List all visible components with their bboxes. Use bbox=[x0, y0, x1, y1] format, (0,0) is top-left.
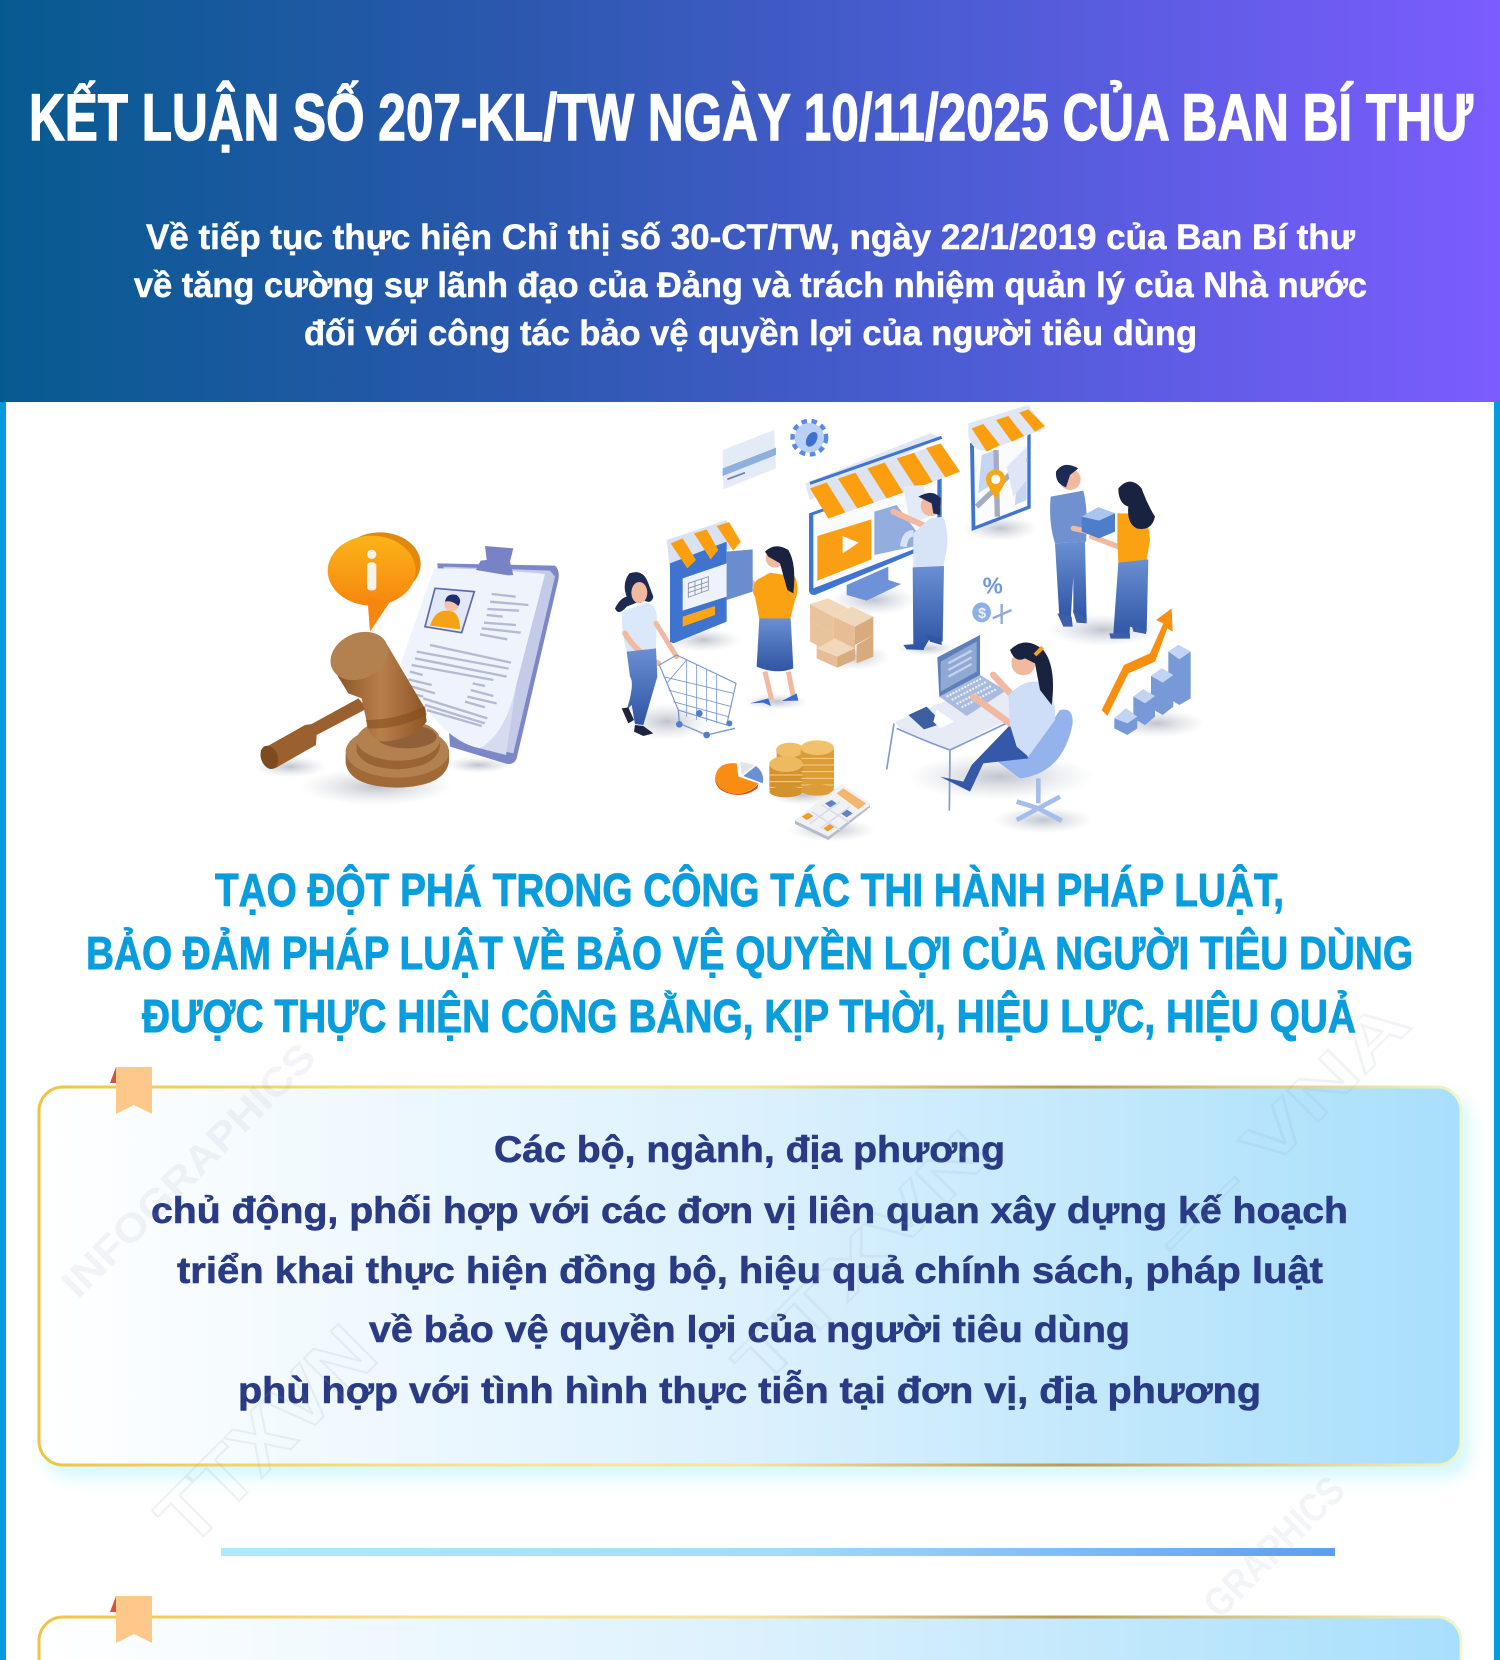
document lines bbox=[405, 594, 528, 726]
watermark: TTXVN bbox=[719, 1116, 1003, 1400]
icon: bookmark ribbon bbox=[110, 1596, 152, 1643]
icon: woman pushing a cart bbox=[615, 572, 736, 740]
main heading: TẠO ĐỘT PHÁ TRONG CÔNG TÁC THI HÀNH PHÁP LUẬT, bbox=[215, 864, 1284, 916]
panel text: về bảo vệ quyền lợi của người tiêu dùng bbox=[369, 1309, 1130, 1350]
watermark: GRAPHICS bbox=[1195, 1468, 1354, 1626]
icon: percent, dollar and plus symbols: % bbox=[983, 572, 1003, 598]
main heading bbox=[86, 864, 1413, 1042]
icon: cardboard boxes bbox=[810, 598, 890, 670]
icon: coin stacks bbox=[767, 740, 840, 805]
panel: second card (cropped) bbox=[39, 1596, 1461, 1660]
icon: pie chart bbox=[715, 762, 763, 795]
panel text: chủ động, phối hợp với các đơn vị liên quan xây dựng kế hoạch bbox=[151, 1190, 1348, 1231]
panel text: Các bộ, ngành, địa phương bbox=[494, 1129, 1005, 1170]
icon: gear bbox=[793, 422, 825, 454]
watermark: — VNA bbox=[1139, 986, 1423, 1270]
panel text: triển khai thực hiện đồng bộ, hiệu quả chính sách, pháp luật bbox=[177, 1250, 1323, 1291]
divider bar bbox=[221, 1548, 1335, 1556]
icon: bookmark ribbon bbox=[110, 1067, 152, 1114]
icon: man at monitor bbox=[893, 485, 957, 656]
icon: gavel shadows bbox=[253, 756, 512, 805]
icon: woman with ponytail at stall bbox=[727, 546, 808, 710]
icon: online store monitor bbox=[805, 433, 960, 615]
icon: percent, dollar and plus symbols: $ bbox=[978, 606, 986, 622]
icon: gavel bbox=[257, 623, 449, 788]
icon: couple exchanging a parcel bbox=[1047, 465, 1160, 646]
icon: online stall kiosk bbox=[667, 520, 741, 652]
illustration: e-commerce scene bbox=[715, 405, 1205, 842]
subtitle bbox=[134, 218, 1367, 353]
watermark: INFOGRAPHICS bbox=[53, 1035, 325, 1306]
shopping cart bbox=[659, 655, 736, 735]
panel text bbox=[151, 1129, 1348, 1411]
icon: info speech bubble bbox=[328, 532, 421, 632]
icon: credit card bbox=[723, 430, 776, 489]
subtitle: về tăng cường sự lãnh đạo của Đảng và trách nhiệm quản lý của Nhà nước bbox=[134, 266, 1367, 305]
icon: growth chart with arrow bbox=[1102, 608, 1205, 737]
subtitle: đối với công tác bảo vệ quyền lợi của người tiêu dùng bbox=[304, 314, 1197, 353]
icon: calculator bbox=[788, 784, 875, 842]
icon: map tablet bbox=[962, 405, 1045, 541]
watermark: TTXVN bbox=[139, 1308, 393, 1562]
icon: clipboard bbox=[401, 546, 559, 764]
icon: percent, dollar and plus symbols bbox=[972, 572, 1012, 624]
icon: woman at laptop bbox=[887, 635, 1093, 833]
illustration: gavel, clipboard and shopper bbox=[253, 520, 741, 805]
subtitle: Về tiếp tục thực hiện Chỉ thị số 30-CT/TW, ngày 22/1/2019 của Ban Bí thư bbox=[146, 218, 1356, 257]
panel text: phù hợp với tình hình thực tiễn tại đơn vị, địa phương bbox=[238, 1370, 1261, 1411]
watermark bbox=[53, 986, 1423, 1626]
header banner bbox=[0, 0, 1500, 402]
photo frame bbox=[425, 588, 474, 633]
panel: ministries and localities bbox=[39, 1067, 1470, 1478]
